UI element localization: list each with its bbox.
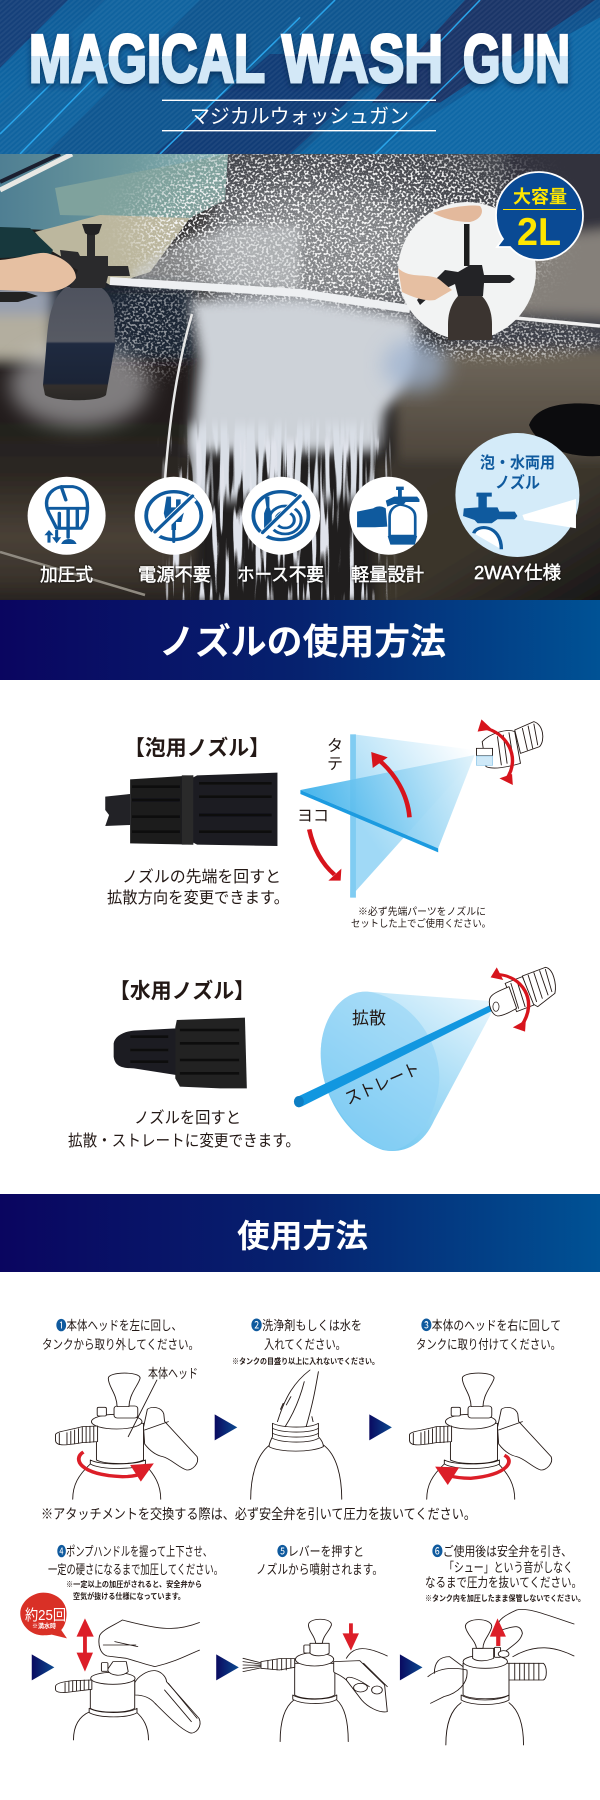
icon: foam nozzle tip xyxy=(476,722,543,768)
feature icon: 2-way nozzle: 泡・水両用 xyxy=(480,454,555,472)
feature icon: 2-way nozzle: ノズル xyxy=(495,473,540,492)
heading: foam nozzle: 【泡用ノズル】 xyxy=(124,736,270,760)
illustration: step 3 bottle xyxy=(409,1373,552,1499)
text: step 5: ❺レバーを押すと xyxy=(277,1544,364,1559)
label: vertical: タ xyxy=(327,737,343,755)
text: step 1: ❶本体ヘッドを左に回し、 xyxy=(56,1318,182,1333)
photo: water nozzle xyxy=(114,1018,247,1088)
arrow: step 5 to 6 xyxy=(400,1654,423,1680)
section header: usage: 使用方法 xyxy=(237,1218,368,1254)
text: step 2: 入れてください。 xyxy=(264,1337,346,1352)
panel: step 6 xyxy=(425,1544,585,1745)
illustration: step 4 bottle xyxy=(55,1618,200,1740)
callout text xyxy=(25,1607,66,1630)
diagram: water spray cone xyxy=(294,967,555,1151)
label: vertical xyxy=(327,737,343,773)
text: step 6 xyxy=(425,1544,585,1603)
feature labels xyxy=(40,563,561,585)
text: step 2 xyxy=(232,1318,379,1366)
illustration: step 2 bottle xyxy=(251,1370,342,1499)
diagram: foam spray direction xyxy=(300,719,543,898)
text: step 4: 空気が抜ける仕様になっています。 xyxy=(73,1591,185,1601)
text: foam nozzle description: ノズルの先端を回すと xyxy=(122,868,281,886)
arrow: into step 4 xyxy=(32,1654,54,1680)
panel: hero photo xyxy=(0,140,600,610)
section header: nozzle usage: ノズルの使用方法 xyxy=(159,621,446,662)
panel: step 4 xyxy=(20,1544,223,1740)
text: step 2: ❷洗浄剤もしくは水を xyxy=(251,1318,362,1333)
text: step 5: ノズルから噴射されます。 xyxy=(256,1562,383,1577)
capacity badge xyxy=(496,172,583,260)
section header: usage xyxy=(0,1194,600,1272)
feature icon: lightweight xyxy=(349,477,427,555)
product bottle held in hand xyxy=(0,224,150,427)
arrow: step 1 to 2 xyxy=(215,1414,237,1440)
subtitle: マジカルウォッシュガン xyxy=(190,105,409,128)
feature labels: 電源不要 xyxy=(138,565,211,585)
feature icon: no power xyxy=(135,477,213,555)
foam spray xyxy=(110,154,600,600)
callout: about 25 strokes xyxy=(20,1593,67,1638)
arrow: step 4 to 5 xyxy=(216,1654,239,1680)
car door background xyxy=(0,140,600,610)
label: vertical: テ xyxy=(327,756,343,773)
text: step 1: タンクから取り外してください。 xyxy=(42,1337,199,1352)
title: WASH xyxy=(282,21,443,97)
title xyxy=(29,21,570,97)
note: foam nozzle: セットした上でご使用ください。 xyxy=(351,917,491,930)
text: foam nozzle description xyxy=(107,868,289,907)
feature icon: pressurised xyxy=(28,477,106,555)
feature labels: ホース不要 xyxy=(237,565,324,585)
panel: water nozzle xyxy=(68,967,555,1151)
feature labels: 加圧式 xyxy=(40,565,93,585)
feature labels: 2WAY仕様 xyxy=(474,563,561,583)
icon: water nozzle tip xyxy=(489,967,555,1016)
text: step 4: ❹ポンプハンドルを握って上下させ、 xyxy=(57,1544,212,1559)
text: step 4: 一定の硬さになるまで加圧してください。 xyxy=(48,1562,223,1577)
text: step 2: ※タンクの目盛り以上に入れないでください。 xyxy=(232,1356,379,1366)
text: water nozzle description: ノズルを回すと xyxy=(134,1109,241,1127)
label: horizontal: ヨコ xyxy=(297,808,329,825)
illustration: step 5 bottle xyxy=(243,1619,387,1742)
note: attachment warning: ※アタッチメントを交換する際は、必ず安全弁を引いて圧力を抜いてください。 xyxy=(41,1506,476,1522)
text: foam nozzle description: 拡散方向を変更できます。 xyxy=(107,889,289,907)
heading: water nozzle: 【水用ノズル】 xyxy=(109,979,255,1003)
panel: step 5 xyxy=(243,1544,387,1742)
panel: step 3 xyxy=(409,1318,561,1499)
text: step 1 xyxy=(42,1318,199,1352)
feature icon: 2-way nozzle xyxy=(455,433,579,557)
inset photo: pumping bottle xyxy=(398,202,536,340)
panel: foam nozzle xyxy=(105,719,543,930)
note: foam nozzle: ※必ず先端パーツをノズルに xyxy=(358,905,486,918)
text: step 3 xyxy=(416,1318,561,1352)
callout text: 約25回 xyxy=(25,1607,66,1624)
label: diffuse: 拡散 xyxy=(352,1009,386,1028)
label: body head: 本体ヘッド xyxy=(148,1366,198,1381)
callout text: ※満水時 xyxy=(32,1621,56,1630)
note: foam nozzle xyxy=(351,905,491,930)
text: water nozzle description: 拡散・ストレートに変更できます。 xyxy=(68,1132,300,1150)
text: step 3: ❸本体のヘッドを右に回して xyxy=(421,1318,561,1333)
panel: step 2 xyxy=(232,1318,379,1499)
panel: header banner xyxy=(0,0,600,154)
illustration: step 1 bottle xyxy=(55,1373,198,1499)
title: MAGICAL xyxy=(29,21,265,97)
text: step 4: ※一定以上の加圧がされると、安全弁から xyxy=(66,1579,202,1589)
feature icon: no hose xyxy=(242,477,320,555)
capacity badge: 2L xyxy=(517,211,561,254)
text: step 3: タンクに取り付けてください。 xyxy=(416,1337,561,1352)
feature labels: 軽量設計 xyxy=(351,565,424,585)
capacity badge: 大容量 xyxy=(513,187,567,207)
arrow: step 2 to 3 xyxy=(369,1414,392,1440)
panel: step 1 xyxy=(42,1318,199,1499)
text: step 4 xyxy=(48,1544,223,1601)
text: step 5 xyxy=(256,1544,383,1577)
text: step 6: ❻ご使用後は安全弁を引き、 xyxy=(432,1544,572,1559)
text: water nozzle description xyxy=(68,1109,300,1150)
label: straight: ストレート xyxy=(342,1059,423,1109)
section header: nozzle usage xyxy=(0,600,600,680)
illustration: step 6 bottle xyxy=(428,1609,574,1745)
photo: foam nozzle xyxy=(105,773,277,846)
